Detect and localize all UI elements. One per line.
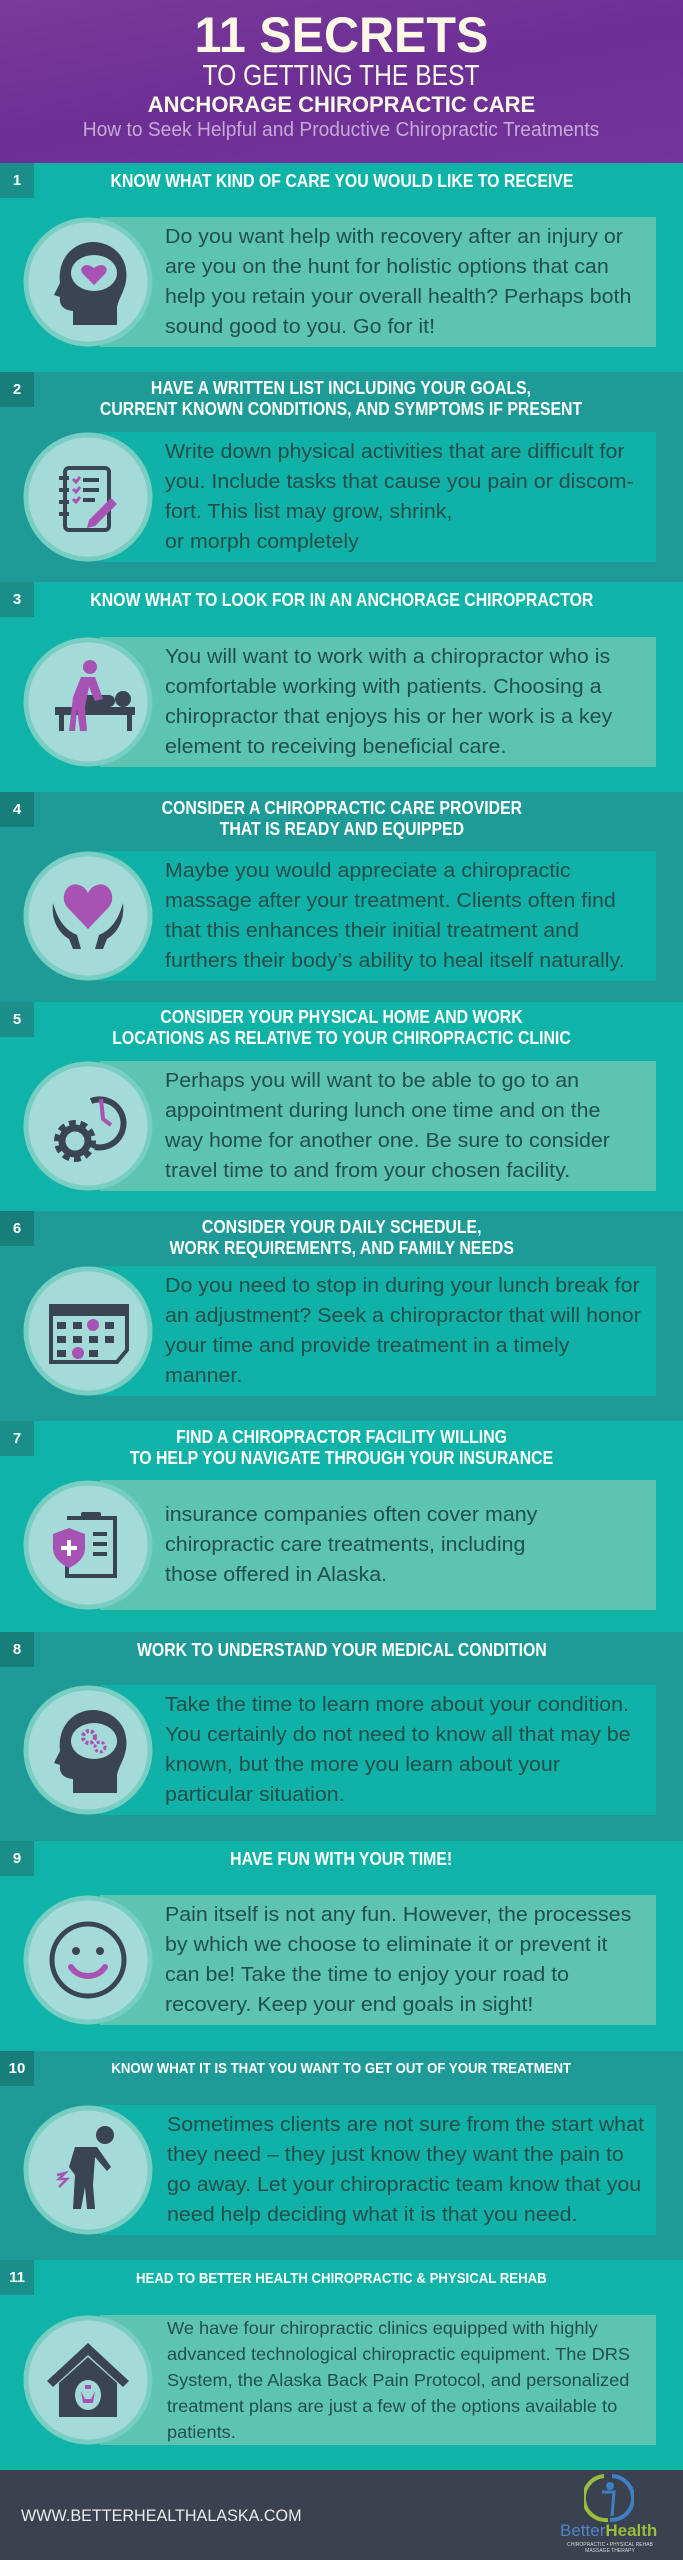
text 6: your time and provide treatment in a timely bbox=[165, 1335, 569, 1357]
text 6: an adjustment? Seek a chiropractor that will honor bbox=[165, 1305, 641, 1327]
heading 6: WORK REQUIREMENTS, AND FAMILY NEEDS bbox=[169, 1238, 514, 1258]
text 3: comfortable working with patients. Choosing a bbox=[165, 676, 602, 698]
icon: person with back pain bbox=[24, 2106, 152, 2234]
text 11: treatment plans are just a few of the options available to bbox=[167, 2396, 617, 2416]
text 5 bbox=[165, 1070, 610, 1182]
panel: secret 8 bbox=[0, 1632, 683, 1841]
tagline: How to Seek Helpful and Productive Chiropractic Treatments bbox=[83, 119, 600, 141]
logo bbox=[560, 2474, 657, 2554]
icon: insurance shield bbox=[24, 1480, 152, 1610]
text 5: way home for another one. Be sure to consider bbox=[165, 1130, 610, 1152]
heading 7: TO HELP YOU NAVIGATE THROUGH YOUR INSURANCE bbox=[130, 1448, 553, 1468]
heading 2: CURRENT KNOWN CONDITIONS, AND SYMPTOMS IF PRESENT bbox=[100, 399, 583, 419]
text 6: Do you need to stop in during your lunch break for bbox=[165, 1275, 640, 1297]
heading 5: CONSIDER YOUR PHYSICAL HOME AND WORK bbox=[160, 1007, 523, 1027]
text 3: chiropractor that enjoys his or her work is a key bbox=[165, 706, 612, 728]
footer bbox=[0, 2470, 683, 2560]
icon: head with heart bbox=[24, 218, 152, 346]
heading 8: WORK TO UNDERSTAND YOUR MEDICAL CONDITION bbox=[137, 1640, 546, 1660]
icon: gear and clock bbox=[24, 1062, 152, 1190]
number 7 bbox=[0, 1421, 34, 1456]
number 4: 4 bbox=[13, 801, 21, 818]
logo: BetterHealth bbox=[560, 2521, 657, 2540]
text 9: can be! Take the time to enjoy your road to bbox=[165, 1964, 569, 1986]
text 7 bbox=[165, 1504, 538, 1586]
icon: calendar bbox=[24, 1266, 152, 1396]
text 7: those offered in Alaska. bbox=[165, 1564, 387, 1586]
number 3: 3 bbox=[13, 591, 21, 608]
text 3: element to receiving beneficial care. bbox=[165, 736, 506, 758]
text 3: You will want to work with a chiropractor who is bbox=[165, 646, 610, 668]
heading 2: HAVE A WRITTEN LIST INCLUDING YOUR GOALS, bbox=[151, 378, 532, 398]
text 10 bbox=[167, 2114, 644, 2226]
heading 11: HEAD TO BETTER HEALTH CHIROPRACTIC & PHYSICAL REHAB bbox=[136, 2270, 547, 2287]
heading 1: KNOW WHAT KIND OF CARE YOU WOULD LIKE TO RECEIVE bbox=[110, 171, 573, 191]
icon: massage table bbox=[24, 638, 152, 766]
icon: house bbox=[24, 2316, 152, 2444]
text 1: are you on the hunt for holistic options that can bbox=[165, 256, 609, 278]
number 11: 11 bbox=[9, 2269, 25, 2286]
text 4: massage after your treatment. Clients often find bbox=[165, 890, 616, 912]
heading 2 bbox=[100, 378, 583, 419]
text 8: known, but the more you learn about your bbox=[165, 1754, 560, 1776]
heading 9: HAVE FUN WITH YOUR TIME! bbox=[230, 1849, 453, 1869]
text 4 bbox=[165, 860, 625, 972]
text 10: Sometimes clients are not sure from the start what bbox=[167, 2114, 644, 2136]
text 5: Perhaps you will want to be able to go to an bbox=[165, 1070, 579, 1092]
panel: secret 7 bbox=[0, 1421, 683, 1632]
logo: CHIROPRACTIC • PHYSICAL REHAB bbox=[567, 2542, 653, 2548]
text 9: Pain itself is not any fun. However, the processes bbox=[165, 1904, 631, 1926]
number 10 bbox=[0, 2051, 34, 2086]
header bbox=[0, 0, 683, 163]
text 4: that this enhances their initial treatment and bbox=[165, 920, 579, 942]
text 11 bbox=[167, 2318, 630, 2442]
number 11 bbox=[0, 2260, 34, 2295]
text 2: you. Include tasks that cause you pain or discom- bbox=[165, 471, 634, 493]
icon: hands with heart bbox=[24, 852, 152, 980]
number 7: 7 bbox=[13, 1430, 21, 1447]
text 1 bbox=[165, 226, 631, 338]
text 4: Maybe you would appreciate a chiropractic bbox=[165, 860, 571, 882]
text 8: particular situation. bbox=[165, 1784, 345, 1806]
subtitle: to getting the best: TO GETTING THE BEST bbox=[203, 60, 480, 92]
heading 6: CONSIDER YOUR DAILY SCHEDULE, bbox=[202, 1217, 481, 1237]
panel: secret 5 bbox=[0, 1002, 683, 1211]
panel: secret 3 bbox=[0, 582, 683, 792]
number 3 bbox=[0, 582, 34, 617]
heading 4 bbox=[161, 798, 522, 839]
text 11: patients. bbox=[167, 2422, 236, 2442]
number 10: 10 bbox=[9, 2060, 25, 2077]
website url: WWW.BETTERHEALTHALASKA.COM bbox=[21, 2506, 302, 2525]
text 9 bbox=[165, 1904, 631, 2016]
number 9: 9 bbox=[13, 1850, 21, 1867]
heading 3: KNOW WHAT TO LOOK FOR IN AN ANCHORAGE CHIROPRACTOR bbox=[90, 590, 593, 610]
panel: secret 10 bbox=[0, 2051, 683, 2260]
number 2 bbox=[0, 372, 34, 407]
text 1: help you retain your overall health? Perhaps both bbox=[165, 286, 631, 308]
icon: smiley bbox=[24, 1896, 152, 2024]
number 8: 8 bbox=[13, 1641, 21, 1658]
text 10: go away. Let your chiropractic team know that you bbox=[167, 2174, 641, 2196]
text 10: they need – they just know they want the pain to bbox=[167, 2144, 624, 2166]
panel: secret 2 bbox=[0, 372, 683, 582]
number 6 bbox=[0, 1211, 34, 1246]
heading 7 bbox=[130, 1427, 553, 1468]
text 11: We have four chiropractic clinics equipped with highly bbox=[167, 2318, 598, 2338]
text 8: You certainly do not need to know all that may be bbox=[165, 1724, 631, 1746]
number 1: 1 bbox=[13, 172, 21, 189]
number 8 bbox=[0, 1632, 34, 1667]
text 1: Do you want help with recovery after an injury or bbox=[165, 226, 623, 248]
logo: MASSAGE THERAPY bbox=[585, 2548, 635, 2554]
text 2: fort. This list may grow, shrink, bbox=[165, 501, 452, 523]
number 9 bbox=[0, 1841, 34, 1876]
text 11: advanced technological chiropractic equipment. The DRS bbox=[167, 2344, 630, 2364]
title: 11 secrets: 11 SECRETS bbox=[195, 7, 488, 63]
panel: secret 9 bbox=[0, 1841, 683, 2051]
heading 10: KNOW WHAT IT IS THAT YOU WANT TO GET OUT OF YOUR TREATMENT bbox=[112, 2060, 571, 2077]
heading 5: LOCATIONS AS RELATIVE TO YOUR CHIROPRACTIC CLINIC bbox=[112, 1028, 571, 1048]
text 10: need help deciding what it is that you need. bbox=[167, 2204, 577, 2226]
text 7: insurance companies often cover many bbox=[165, 1504, 537, 1526]
text 6 bbox=[165, 1275, 641, 1387]
text 11: System, the Alaska Back Pain Protocol, and personalized bbox=[167, 2370, 629, 2390]
subtitle: anchorage chiropractic care: ANCHORAGE CHIROPRACTIC CARE bbox=[148, 92, 535, 117]
number 2: 2 bbox=[13, 381, 21, 398]
text 8: Take the time to learn more about your condition. bbox=[165, 1694, 629, 1716]
panel: secret 6 bbox=[0, 1211, 683, 1421]
number 5: 5 bbox=[13, 1011, 21, 1028]
text 2 bbox=[165, 441, 634, 553]
panel: secret 4 bbox=[0, 792, 683, 1002]
text 4: furthers their body’s ability to heal itself naturally. bbox=[165, 950, 625, 972]
number 4 bbox=[0, 792, 34, 827]
number 1 bbox=[0, 163, 34, 198]
text 8 bbox=[165, 1694, 631, 1806]
heading 4: THAT IS READY AND EQUIPPED bbox=[219, 819, 464, 839]
number 6: 6 bbox=[13, 1220, 21, 1237]
number 5 bbox=[0, 1002, 34, 1037]
text 5: travel time to and from your chosen facility. bbox=[165, 1160, 570, 1182]
text 3 bbox=[165, 646, 612, 758]
heading 7: FIND A CHIROPRACTOR FACILITY WILLING bbox=[176, 1427, 507, 1447]
heading 5 bbox=[112, 1007, 571, 1048]
text 1: sound good to you. Go for it! bbox=[165, 316, 435, 338]
text 9: recovery. Keep your end goals in sight! bbox=[165, 1994, 533, 2016]
text 5: appointment during lunch one time and on the bbox=[165, 1100, 600, 1122]
heading 6 bbox=[169, 1217, 514, 1258]
panel: secret 1 bbox=[0, 163, 683, 372]
text 7: chiropractic care treatments, including bbox=[165, 1534, 525, 1556]
panel: secret 11 bbox=[0, 2260, 683, 2470]
text 6: manner. bbox=[165, 1365, 242, 1387]
icon: head with gears bbox=[24, 1686, 152, 1814]
icon: checklist bbox=[24, 432, 152, 562]
text 2: Write down physical activities that are difficult for bbox=[165, 441, 625, 463]
text 9: by which we choose to eliminate it or prevent it bbox=[165, 1934, 607, 1956]
text 2: or morph completely bbox=[165, 531, 359, 553]
heading 4: CONSIDER A CHIROPRACTIC CARE PROVIDER bbox=[161, 798, 522, 818]
